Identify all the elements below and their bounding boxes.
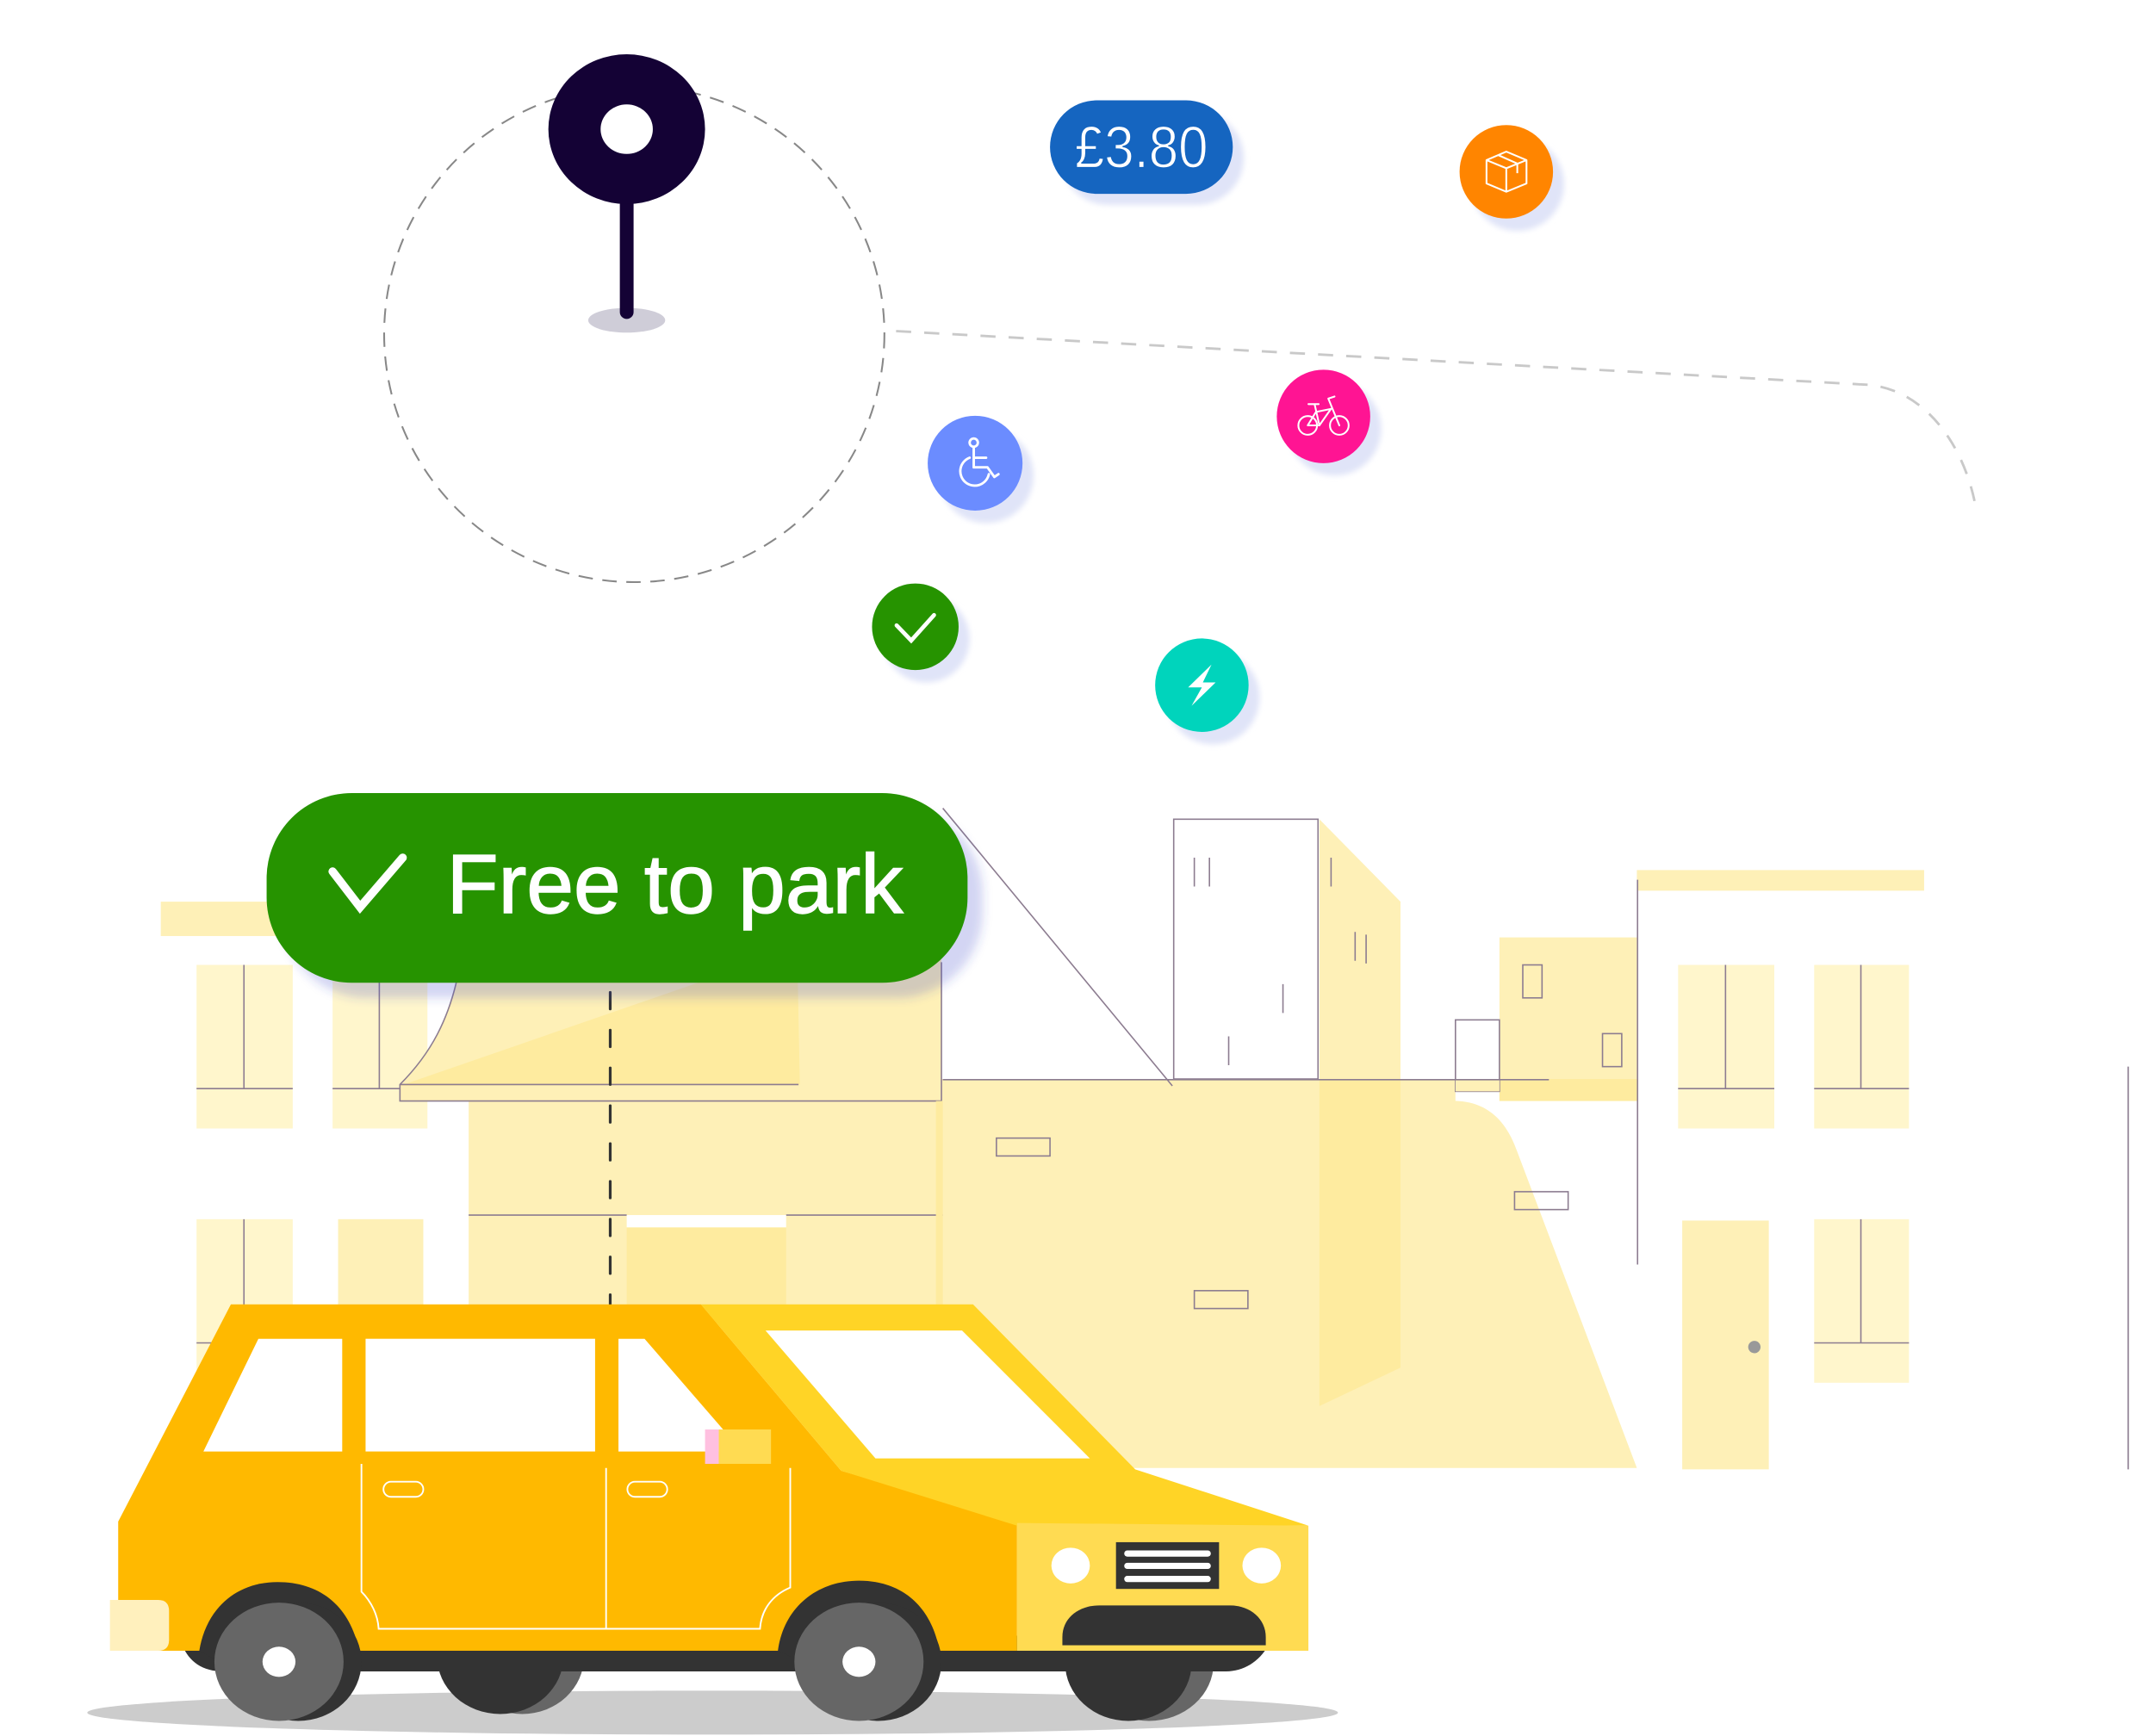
ground and street block bbox=[940, 1079, 1636, 1468]
map pin bbox=[549, 54, 705, 332]
icon: bicycle bbox=[1276, 369, 1382, 475]
icon: parcel box bbox=[1460, 125, 1564, 231]
route line to the right dashed bbox=[886, 331, 1975, 503]
windshield frame and hood bbox=[701, 1305, 1308, 1526]
yellow car bbox=[110, 1305, 1308, 1720]
radius circle dashed bbox=[384, 86, 885, 582]
wing mirror bbox=[705, 1429, 771, 1464]
right house bbox=[1636, 870, 2128, 1469]
ground shadow bbox=[87, 1690, 1338, 1734]
rear bumper light bbox=[110, 1600, 169, 1651]
rear wheel bbox=[214, 1603, 362, 1720]
side windows bbox=[203, 1339, 742, 1452]
icon: check mark bbox=[872, 584, 970, 683]
free to park callout bbox=[267, 793, 983, 998]
door outlines bbox=[362, 1464, 791, 1628]
front wheel arch bbox=[778, 1581, 941, 1666]
building scene background bbox=[161, 809, 2128, 1469]
rear wheel arch bbox=[199, 1582, 362, 1666]
left house bbox=[161, 902, 427, 1370]
grille bbox=[1116, 1542, 1219, 1589]
windshield glass bbox=[766, 1330, 1090, 1459]
bricks bbox=[997, 1138, 1568, 1309]
structure lines bbox=[943, 809, 1549, 1086]
icon: wheelchair accessible bbox=[928, 416, 1034, 523]
side annex bbox=[1456, 938, 1636, 1101]
front wheel bbox=[794, 1603, 941, 1720]
price badge bbox=[1050, 101, 1244, 205]
side body bbox=[118, 1305, 1017, 1651]
price badge: £3.80 bbox=[1075, 115, 1208, 181]
headlights bbox=[1052, 1547, 1281, 1584]
icon: lightning bolt bbox=[1155, 638, 1259, 744]
underbody bbox=[182, 1635, 1269, 1671]
front bumper bbox=[1062, 1605, 1266, 1646]
front panel bbox=[1017, 1523, 1308, 1651]
central building bbox=[400, 948, 943, 1324]
door handles bbox=[383, 1482, 668, 1497]
free to park callout: Free to park bbox=[447, 837, 904, 931]
tower bbox=[1174, 819, 1400, 1406]
route line vertical dashed bbox=[609, 992, 611, 1312]
far wheels bbox=[437, 1598, 1214, 1720]
